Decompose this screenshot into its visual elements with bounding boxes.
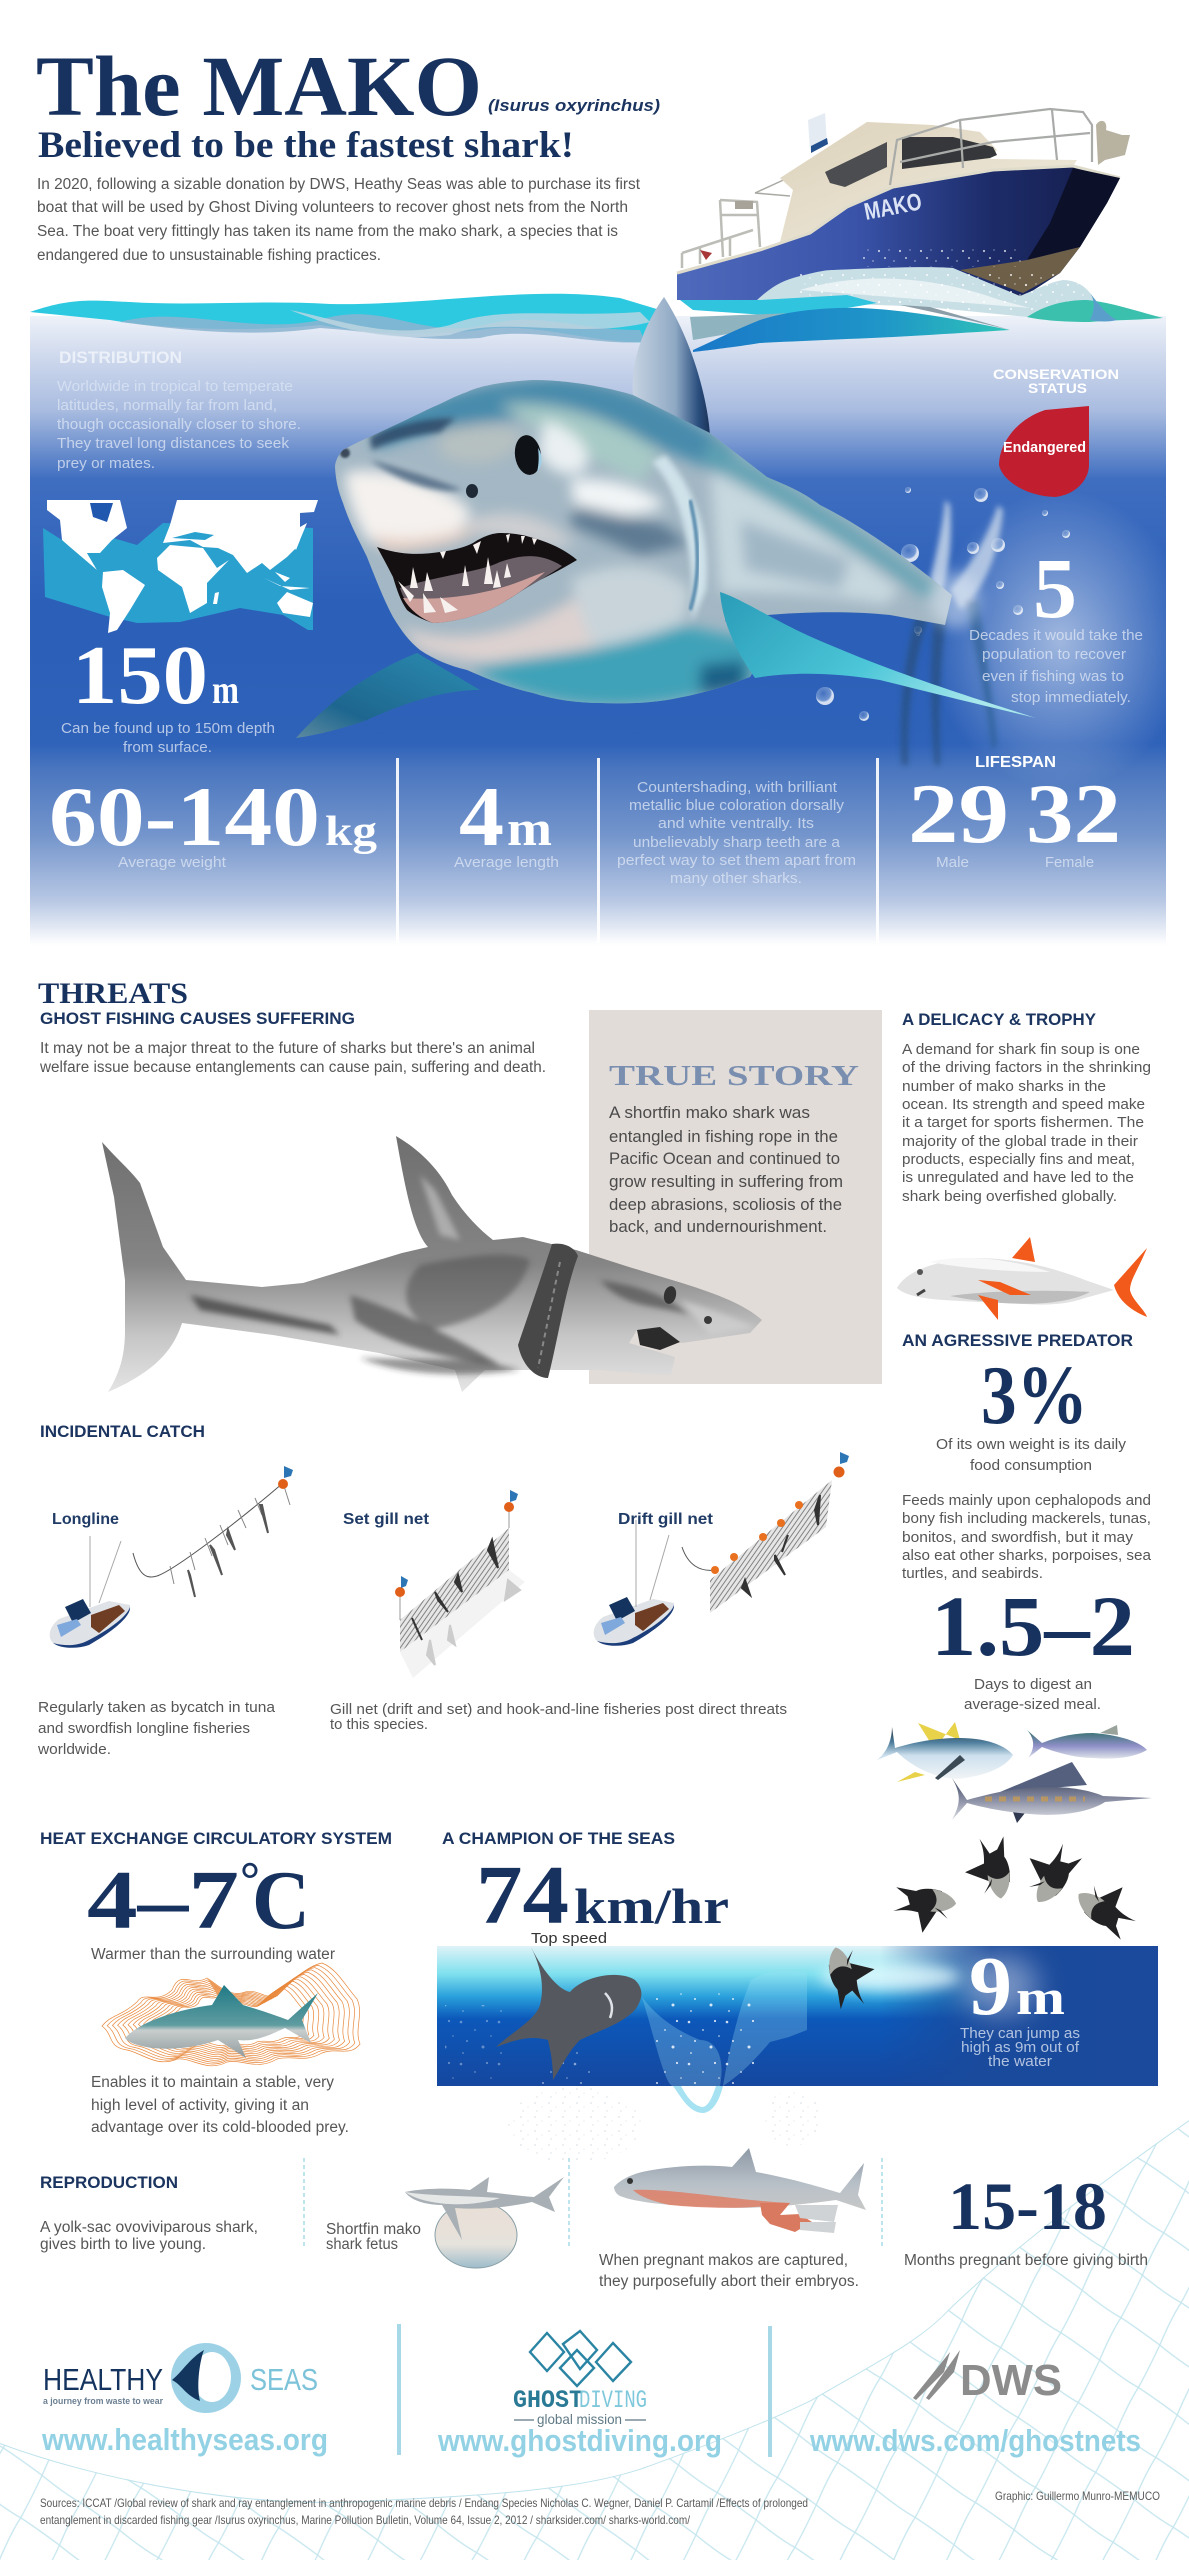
stat: weight — [49, 770, 377, 871]
left pectoral fin — [296, 653, 480, 738]
illustration: white shark with orange fins — [897, 1237, 1147, 1320]
stat: weight: Average weight — [118, 854, 227, 871]
true story text — [609, 1104, 843, 1236]
stat: months pregnant: 15-18 — [948, 2168, 1107, 2244]
stat: recovery decades: even if fishing was to — [982, 668, 1124, 685]
9m stat — [960, 1940, 1080, 2070]
delicacy text: it a target for sports fishermen. The — [902, 1115, 1144, 1131]
stat: speed: km/hr — [574, 1878, 729, 1934]
stat: lifespan: Female — [1045, 854, 1094, 871]
delicacy text: is unregulated and have led to the — [902, 1170, 1134, 1186]
tuna one — [877, 1722, 1013, 1782]
gill net text: Gill net (drift and set) and hook-and-line fisheries post direct threats — [330, 1702, 787, 1718]
stat: length — [454, 770, 559, 871]
teeth — [398, 534, 537, 613]
diagram: drift gill net — [594, 1452, 849, 1646]
pregnant caption: When pregnant makos are captured, — [599, 2252, 848, 2269]
stat: depth: Can be found up to 150m depth — [61, 720, 275, 737]
stat: 3 percent — [936, 1349, 1127, 1474]
illustration: entangled grey shark — [102, 1136, 762, 1392]
diagram: set gill net: Set gill net — [343, 1511, 430, 1528]
countershading text: and white ventrally. Its — [658, 815, 814, 832]
delicacy text: A demand for shark fin soup is one — [902, 1042, 1140, 1058]
stat: lifespan — [908, 754, 1121, 871]
graphic credit: Graphic: Guillermo Munro-MEMUCO — [995, 2489, 1160, 2503]
illustration: large mako shark — [296, 297, 1036, 738]
panel: true story — [589, 1010, 882, 1384]
delicacy text: products, especially fins and meat, — [902, 1152, 1135, 1168]
true story text: deep abrasions, scoliosis of the — [609, 1196, 842, 1214]
intro text: endangered due to unsustainable fishing practices. — [37, 247, 381, 264]
enables text: advantage over its cold-blooded prey. — [91, 2119, 349, 2136]
nostril — [466, 484, 478, 498]
diet text: bony fish including mackerels, tunas, — [902, 1511, 1151, 1527]
illustration: glow and bubbles right — [816, 487, 1189, 790]
9m stat: They can jump as — [960, 2026, 1080, 2042]
logo: ghost diving: global mission — [537, 2411, 622, 2427]
diet text: bonitos, and swordfish, but it may — [902, 1530, 1134, 1546]
9m stat: the water — [988, 2054, 1052, 2070]
stat: temperature: Warmer than the surrounding water — [91, 1946, 335, 1963]
stat: lifespan: Male — [936, 854, 969, 871]
boat name: MAKO — [862, 188, 924, 226]
conservation status — [993, 366, 1119, 497]
stat: lifespan: 29 — [908, 767, 1009, 861]
world map — [43, 500, 318, 633]
stat: recovery decades: Decades it would take the — [969, 627, 1143, 644]
stat: 3 percent: 3% — [981, 1349, 1088, 1442]
stat: depth: from surface. — [123, 739, 212, 756]
intro text: In 2020, following a sizable donation by DWS, Heathy Seas was able to purchase its first — [37, 176, 641, 193]
intro text — [37, 176, 641, 264]
tuna two — [1027, 1725, 1147, 1759]
diagram: longline — [50, 1466, 293, 1648]
illustration: prey fish — [877, 1722, 1152, 1823]
stat: 3 percent: food consumption — [970, 1458, 1092, 1474]
heading: delicacy and trophy: A DELICACY & TROPHY — [902, 1011, 1096, 1029]
stat: months pregnant: Months pregnant before giving birth — [904, 2252, 1148, 2269]
ghost fishing text: welfare issue because entanglements can cause pain, suffering and death. — [39, 1059, 546, 1076]
reproduction text — [40, 2219, 258, 2253]
distribution text: though occasionally closer to shore. — [57, 416, 301, 433]
heading: threats: THREATS — [38, 977, 188, 1010]
logo: DWS: DWS — [960, 2356, 1062, 2405]
panel: jump water — [437, 1939, 1158, 2086]
gill net text — [330, 1702, 787, 1733]
stat: speed: Top speed — [531, 1930, 607, 1947]
stat: days to digest: 1.5–2 — [931, 1578, 1135, 1674]
countershading text: metallic blue coloration dorsally — [629, 797, 845, 814]
longline text: Regularly taken as bycatch in tuna — [38, 1700, 276, 1716]
distribution text — [57, 378, 301, 472]
stat: days to digest — [931, 1578, 1135, 1713]
stat: depth: m — [212, 667, 239, 712]
logo: healthy seas — [43, 2343, 318, 2413]
stat: recovery decades: population to recover — [982, 646, 1126, 663]
diagram: longline: Longline — [52, 1511, 119, 1528]
logo: DWS — [913, 2350, 1062, 2405]
conservation status: CONSERVATION — [993, 366, 1119, 382]
logo: healthy seas: a journey from waste to wear — [43, 2396, 163, 2407]
url: ghost diving: www.ghostdiving.org — [437, 2423, 722, 2458]
true story text: entangled in fishing rope in the — [609, 1128, 838, 1146]
diet text: also eat other sharks, porpoises, sea — [902, 1548, 1152, 1564]
distribution text: They travel long distances to seek — [57, 435, 290, 452]
distribution text: prey or mates. — [57, 455, 155, 472]
enables text: Enables it to maintain a stable, very — [91, 2074, 334, 2091]
heading: distribution: DISTRIBUTION — [59, 349, 182, 367]
body — [335, 380, 952, 704]
stat: days to digest: average-sized meal. — [964, 1697, 1101, 1713]
delicacy text: of the driving factors in the shrinking — [902, 1060, 1151, 1076]
endangered badge: Endangered — [1003, 439, 1086, 456]
sources: entanglement in discarded fishing gear /Isurus oxyrinchus, Marine Pollution Bulletin, Volume 64, Issue 2, 2012 / sharksider.com/ sharks-world.com/ — [40, 2513, 691, 2527]
mouth — [377, 533, 577, 623]
true story text: Pacific Ocean and continued to — [609, 1150, 840, 1168]
stat: recovery decades: stop immediately. — [1011, 689, 1131, 706]
stat: 3 percent: Of its own weight is its daily — [936, 1437, 1127, 1453]
longline text: worldwide. — [37, 1742, 111, 1758]
logo: healthy seas: HEALTHY — [43, 2362, 163, 2397]
dorsal fin — [632, 297, 710, 436]
diet text — [902, 1493, 1152, 1582]
pregnant caption — [599, 2252, 859, 2290]
stat: speed — [476, 1849, 729, 1947]
rope — [518, 1244, 578, 1378]
stat: months pregnant — [904, 2168, 1148, 2269]
ghost fishing text: It may not be a major threat to the future of sharks but there's an animal — [40, 1040, 535, 1057]
heading: distribution — [57, 349, 301, 472]
countershading text: many other sharks. — [670, 870, 802, 887]
conservation status: STATUS — [1028, 380, 1087, 396]
true story text: back, and undernourishment. — [609, 1218, 827, 1236]
stat: recovery decades — [969, 540, 1143, 706]
true story heading: TRUE STORY — [609, 1061, 859, 1092]
countershading text: perfect way to set them apart from — [617, 852, 856, 869]
grey breaching shark — [496, 1947, 641, 2080]
fetus caption: shark fetus — [326, 2236, 398, 2253]
stat: lifespan: LIFESPAN — [975, 754, 1056, 771]
heading: aggressive predator: AN AGRESSIVE PREDATOR — [902, 1332, 1133, 1350]
distribution text: Worldwide in tropical to temperate — [57, 378, 293, 395]
url: DWS: www.dws.com/ghostnets — [809, 2423, 1141, 2458]
heading: champion of the seas: A CHAMPION OF THE SEAS — [442, 1830, 675, 1848]
delicacy text: shark being overfished globally. — [902, 1189, 1117, 1205]
9m stat: m — [1016, 1969, 1065, 2025]
distribution text: latitudes, normally far from land, — [57, 397, 277, 414]
stat: temperature: ° — [240, 1851, 260, 1907]
spray below panel — [508, 2086, 821, 2163]
logo: healthy seas: SEAS — [250, 2362, 318, 2397]
mouth interior — [400, 556, 562, 623]
sources — [40, 2496, 808, 2527]
net emblem — [530, 2331, 631, 2386]
fetus caption: Shortfin mako — [326, 2221, 421, 2238]
stat: temperature: 4–7 — [87, 1854, 239, 1947]
illustration: boat Mako — [677, 109, 1130, 321]
url: healthy seas: www.healthyseas.org — [41, 2422, 328, 2457]
diet text: turtles, and seabirds. — [902, 1566, 1043, 1582]
true story text: grow resulting in suffering from — [609, 1173, 843, 1191]
illustration: tail streaks — [901, 500, 1003, 765]
illustration: wave surface — [30, 293, 1163, 352]
stat: days to digest: Days to digest an — [974, 1677, 1092, 1693]
stat: depth: 150 — [72, 629, 208, 722]
pregnant caption: they purposefully abort their embryos. — [599, 2273, 859, 2290]
diagram: set gill net — [343, 1490, 525, 1678]
illustration: jumping black sharks — [892, 1833, 1147, 1941]
heading: incidental catch: INCIDENTAL CATCH — [40, 1423, 205, 1441]
decorative net background — [0, 2100, 1189, 2560]
panel: ocean background — [30, 316, 1166, 945]
marlin — [952, 1762, 1152, 1823]
intro text: Sea. The boat very fittingly has taken its name from the mako shark, a species that is — [37, 223, 618, 240]
diagram: drift gill net: Drift gill net — [618, 1511, 714, 1528]
logo: ghost diving: DIVING — [579, 2386, 647, 2415]
logo: ghost diving — [513, 2331, 647, 2427]
reproduction text: gives birth to live young. — [40, 2236, 206, 2253]
illustration: shark fetus with yolk sac — [405, 2177, 564, 2268]
logo: ghost diving: GHOST — [513, 2386, 583, 2415]
body shading — [345, 378, 940, 706]
delicacy text: number of mako sharks in the — [902, 1079, 1106, 1095]
diet text: Feeds mainly upon cephalopods and — [902, 1493, 1151, 1509]
stat: lifespan: 32 — [1026, 767, 1121, 861]
countershading text — [617, 779, 856, 887]
small jumping shark — [824, 1939, 883, 2011]
logo ring — [171, 2343, 241, 2413]
enables text: high level of activity, giving it an — [91, 2097, 309, 2114]
heading: ghost fishing: GHOST FISHING CAUSES SUFFERING — [40, 1010, 355, 1028]
gill net text: to this species. — [330, 1717, 428, 1733]
true story text: A shortfin mako shark was — [609, 1104, 810, 1122]
delicacy text: majority of the global trade in their — [902, 1134, 1138, 1150]
illustration: pregnant shark — [614, 2148, 866, 2233]
stat: recovery decades: 5 — [1033, 540, 1077, 636]
stat: length: Average length — [454, 854, 559, 871]
intro text: boat that will be used by Ghost Diving volunteers to recover ghost nets from the North — [37, 199, 628, 216]
enables text — [91, 2074, 349, 2136]
stat: temperature: C — [252, 1854, 310, 1947]
fetus caption — [326, 2221, 421, 2253]
9m stat: high as 9m out of — [961, 2040, 1080, 2056]
longline text — [37, 1700, 276, 1758]
stat: weight: kg — [325, 809, 377, 855]
countershading text: Countershading, with brilliant — [637, 779, 838, 796]
stat: speed: 74 — [476, 1849, 569, 1942]
9m stat: 9 — [969, 1940, 1012, 2033]
illustration: heat contours and shark — [102, 1963, 360, 2066]
longline text: and swordfish longline fisheries — [38, 1721, 250, 1737]
ghost fishing text — [39, 1040, 546, 1076]
reproduction text: A yolk-sac ovoviviparous shark, — [40, 2219, 258, 2236]
sources: Sources: ICCAT /Global review of shark and ray entanglement in anthropogenic marine debris / Endang Species Nicholas C. Wegner, Daniel P. Cartamil /Effects of prolonged — [40, 2496, 808, 2510]
eye — [512, 433, 544, 477]
title: The MAKO — [36, 38, 482, 134]
heading: heat exchange: HEAT EXCHANGE CIRCULATORY SYSTEM — [40, 1830, 392, 1848]
right pectoral fin — [720, 592, 1036, 718]
delicacy text — [902, 1042, 1151, 1205]
stat: length: 4 — [459, 770, 504, 864]
scientific name: (Isurus oxyrinchus) — [488, 96, 660, 115]
subtitle: Believed to be the fastest shark! — [38, 125, 574, 166]
stat: length: m — [507, 800, 552, 856]
stat: depth — [61, 629, 275, 756]
stat: temperature — [87, 1851, 335, 1963]
countershading text: unbelievably sharp teeth are a — [633, 834, 841, 851]
delicacy text: ocean. Its strength and speed make — [902, 1097, 1145, 1113]
heading: reproduction: REPRODUCTION — [40, 2174, 178, 2192]
stat: weight: 60-140 — [49, 770, 320, 864]
